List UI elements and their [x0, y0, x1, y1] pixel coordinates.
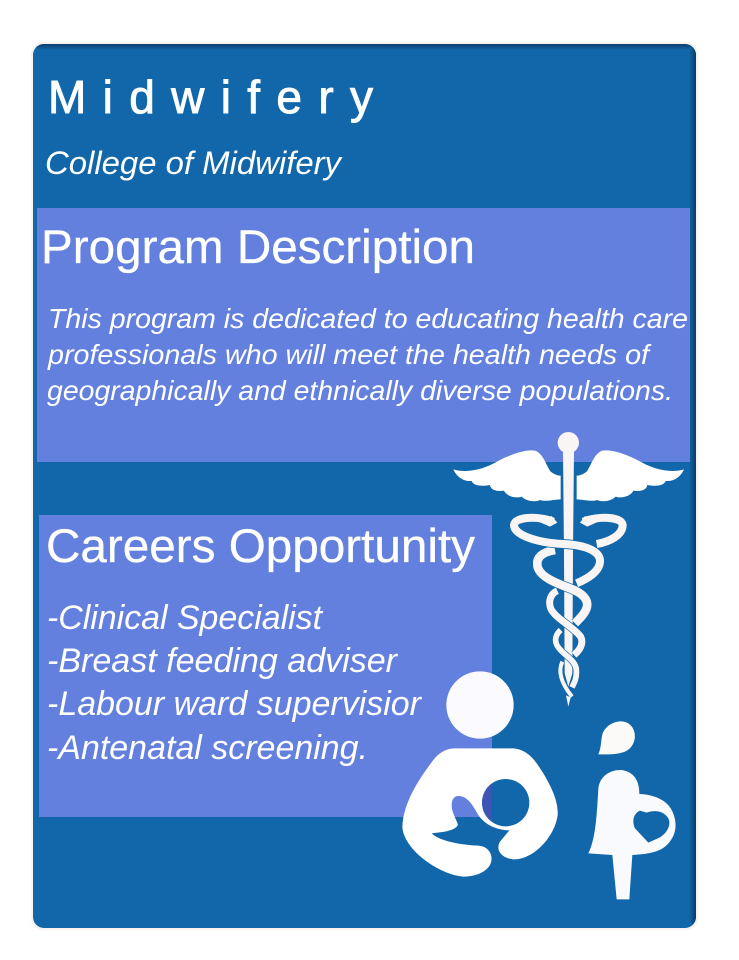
icon: breastfeeding mother [402, 671, 558, 877]
careers list [47, 599, 423, 767]
panel: careers opportunity [39, 515, 492, 817]
heading: program description: Program Description [41, 220, 475, 273]
subtitle: College of Midwifery [45, 145, 343, 181]
heading: careers opportunity: Careers Opportunity [46, 519, 476, 572]
careers list: -Labour ward supervisior [47, 685, 423, 723]
title: M i d w i f e r y [48, 71, 373, 123]
icon: pregnant woman with heart [588, 721, 676, 899]
careers list: -Antenatal screening. [47, 729, 368, 767]
careers list: -Breast feeding adviser [47, 642, 399, 680]
careers list: -Clinical Specialist [47, 599, 324, 637]
description text [47, 303, 688, 406]
description text: geographically and ethnically diverse populations. [47, 375, 673, 406]
description text: professionals who will meet the health needs of [47, 339, 652, 370]
description text: This program is dedicated to educating health care [48, 303, 688, 334]
icon: caduceus [453, 432, 684, 707]
panel: program description [37, 208, 690, 462]
